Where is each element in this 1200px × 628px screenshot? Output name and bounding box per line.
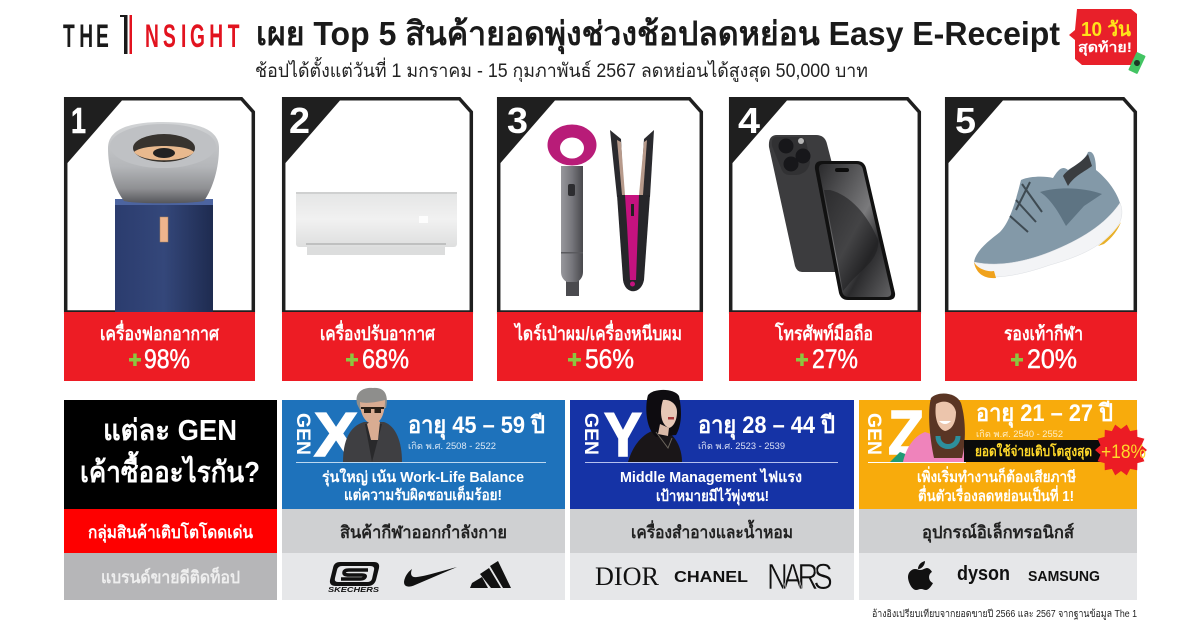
- rank number 5: 5: [955, 100, 976, 141]
- growth figure: [129, 344, 190, 374]
- growth figure: [796, 344, 858, 374]
- description: [620, 467, 802, 506]
- growth figure: 68%: [362, 344, 409, 374]
- age: อายุ 45 – 59 ปี: [408, 412, 545, 441]
- burst: +18%: +18%: [1101, 442, 1146, 463]
- gen label: X: [314, 401, 358, 470]
- category: สินค้ากีฬาออกกำลังกาย: [340, 522, 507, 542]
- panel: Gen Z: [859, 394, 1147, 600]
- badge: 10 days left: [1069, 9, 1146, 74]
- burst: +18%: [1095, 425, 1147, 475]
- logo: Dyson: dyson: [957, 563, 1010, 585]
- portrait: man with glasses: [343, 388, 402, 462]
- panel: product 4 mobile phone: [729, 97, 921, 381]
- description: [322, 468, 524, 504]
- logo: Skechers: SKECHERS: [328, 587, 379, 594]
- gen label: Y: [604, 401, 642, 470]
- panel: product 3 hair dryer and straightener: [497, 97, 703, 381]
- gen label: [863, 399, 924, 468]
- logo: Nars: NARS: [767, 556, 832, 597]
- category: เครื่องสำอางและน้ำหอม: [631, 519, 793, 542]
- description: เพิ่งเริ่มทำงานก็ต้องเสียภาษี: [917, 466, 1076, 486]
- gen label: GEN: [863, 413, 884, 455]
- row label: top brands: แบรนด์ขายดีติดท็อป: [101, 565, 240, 587]
- logo: Dior: DIOR: [595, 562, 660, 591]
- birth years: เกิด พ.ศ. 2523 - 2539: [698, 441, 785, 451]
- category: อุปกรณ์อิเล็กทรอนิกส์: [922, 520, 1075, 543]
- image: air conditioner: [296, 192, 457, 255]
- description: แต่ความรับผิดชอบเต็มร้อย!: [344, 485, 502, 504]
- header logo: The 1 Insight: [63, 15, 240, 54]
- birth years: เกิด พ.ศ. 2540 - 2552: [976, 429, 1063, 439]
- description: รุ่นใหญ่ เน้น Work-Life Balance: [322, 468, 524, 487]
- panel: product 1 air purifier: [64, 97, 255, 381]
- icon: banknote: [1128, 52, 1146, 74]
- growth figure: [568, 344, 634, 374]
- subtitle: ช้อปได้ตั้งแต่วันที่ 1 มกราคม - 15 กุมภาพันธ์ 2567 ลดหย่อนได้สูงสุด 50,000 บาท: [255, 57, 868, 83]
- portrait: smiling student: [890, 394, 969, 462]
- description: ตื่นตัวเรื่องลดหย่อนเป็นที่ 1!: [918, 485, 1074, 505]
- logo: Nike: [404, 567, 457, 587]
- logo: Skechers: [328, 562, 379, 594]
- image: air purifier: [108, 122, 219, 312]
- panel: Gen Y: [570, 390, 854, 600]
- product label: โทรศัพท์มือถือ: [774, 322, 873, 345]
- portrait: woman in black: [628, 390, 682, 462]
- callout: highest spending growth: ยอดใช้จ่ายเติบโตสูงสุด: [975, 442, 1092, 460]
- gen label: GEN: [580, 413, 601, 455]
- birth years: เกิด พ.ศ. 2508 - 2522: [408, 441, 496, 451]
- gen label: [580, 401, 642, 470]
- gen label: Z: [888, 399, 924, 468]
- header logo: The 1 Insight: THE: [63, 18, 109, 54]
- description: เป้าหมายมีไว้พุ่งชน!: [656, 486, 769, 506]
- heading: each gen: [80, 415, 260, 489]
- logo: Apple: [908, 561, 933, 590]
- logo: Samsung: SAMSUNG: [1028, 568, 1100, 585]
- product label: เครื่องปรับอากาศ: [320, 320, 436, 345]
- image: hair dryer: [548, 124, 596, 296]
- age: อายุ 28 – 44 ปี: [698, 412, 835, 441]
- growth figure: 98%: [144, 344, 190, 374]
- rank number 4: 4: [738, 100, 760, 141]
- image: running shoe: [974, 152, 1122, 278]
- growth figure: [346, 344, 409, 374]
- heading: each gen: เค้าซื้ออะไรกัน?: [80, 450, 260, 489]
- panel: product 5 sports shoes: [945, 97, 1137, 381]
- row label: standout categories: กลุ่มสินค้าเติบโตโดดเด่น: [88, 522, 253, 543]
- badge: 10 days left: สุดท้าย!: [1078, 39, 1132, 56]
- description: [917, 466, 1076, 505]
- logo: Chanel: CHANEL: [674, 569, 748, 586]
- header logo: The 1 Insight: NSIGHT: [145, 18, 240, 54]
- product label: รองเท้ากีฬา: [1004, 323, 1083, 345]
- growth figure: 27%: [812, 344, 858, 374]
- rank number 1: 1: [71, 100, 86, 141]
- heading: each gen: แต่ละ GEN: [103, 415, 237, 447]
- panel: Gen X: [282, 388, 565, 600]
- panel: row headers: [64, 400, 277, 600]
- footnote: อ้างอิงเปรียบเทียบจากยอดขายปี 2566 และ 2567 จากฐานข้อมูล The 1: [872, 608, 1137, 620]
- age: อายุ 21 – 27 ปี: [976, 400, 1113, 429]
- product label: เครื่องฟอกอากาศ: [100, 320, 220, 345]
- rank number 3: 3: [507, 100, 528, 141]
- growth figure: 56%: [585, 344, 634, 374]
- logo: Adidas: [470, 561, 511, 588]
- rank number 2: 2: [289, 100, 310, 141]
- product label: ไดร์เป่าผม/เครื่องหนีบผม: [513, 320, 682, 345]
- panel: product 2 air conditioner: [282, 97, 473, 381]
- badge: 10 days left: 10 วัน: [1081, 19, 1131, 41]
- description: Middle Management ไฟแรง: [620, 467, 802, 486]
- image: hair straightener: [610, 130, 654, 291]
- callout: highest spending growth: [964, 425, 1147, 475]
- gen label: [292, 401, 358, 470]
- growth figure: 20%: [1027, 344, 1077, 374]
- title: เผย Top 5 สินค้ายอดพุ่งช่วงช้อปลดหย่อน Easy E-Receipt: [256, 15, 1060, 55]
- gen label: GEN: [292, 413, 313, 455]
- image: smartphones: [769, 135, 895, 300]
